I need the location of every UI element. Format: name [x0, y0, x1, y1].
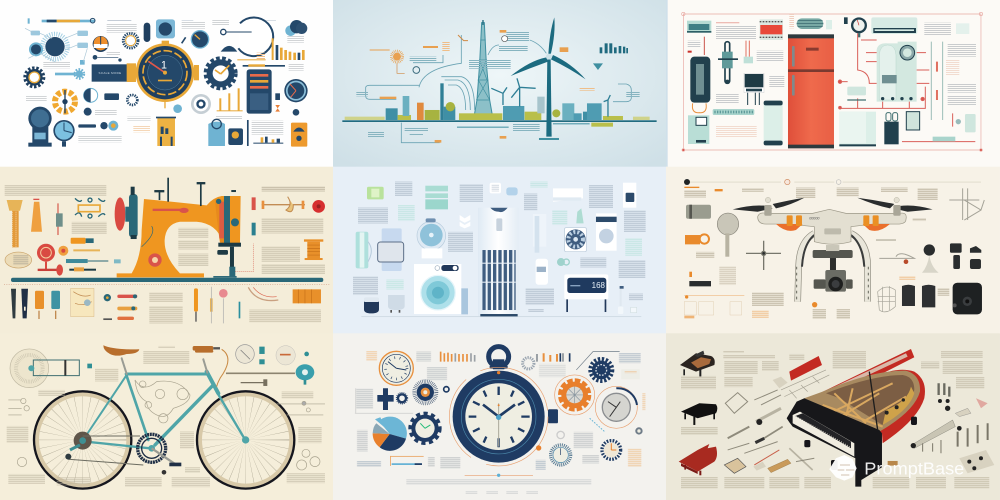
PromptBase watermark [829, 455, 964, 481]
bobbin and dials [37, 238, 94, 276]
text blocks [681, 351, 989, 488]
pie chart [373, 417, 407, 451]
skyline buildings [345, 83, 650, 120]
front wheel [197, 391, 294, 489]
bottom right objects [208, 119, 249, 146]
gear black with gold hub [25, 68, 43, 86]
valve assembly [718, 42, 738, 84]
red frame border [682, 12, 983, 151]
right drone parts [922, 243, 981, 273]
radiator capsule top [789, 13, 832, 29]
top right gauge [182, 30, 209, 49]
arc conduits [366, 35, 631, 143]
panel: mechanical gauges infographic [0, 0, 334, 167]
spiky gear left [414, 381, 449, 403]
washing machine [414, 264, 468, 314]
green radiator left [687, 21, 711, 33]
blueprint details in frame [135, 380, 190, 423]
small orange gauge [93, 36, 122, 62]
navy gear top right [576, 352, 620, 381]
navy gauge right [275, 79, 308, 116]
overlapping circles [285, 20, 307, 36]
orange sewing machine body [117, 196, 241, 277]
top rule line [684, 179, 981, 185]
text blocks [26, 19, 304, 142]
top right frame schematic [879, 188, 984, 258]
gear disc left [10, 349, 92, 388]
floor line [361, 315, 641, 318]
exploded parts left [725, 390, 814, 470]
red piping network [838, 33, 975, 142]
dark monitor [744, 73, 764, 105]
fan box [565, 228, 586, 252]
connector dots [78, 108, 118, 131]
panel: bicycle infographic [0, 333, 334, 500]
orange spool right [304, 239, 323, 260]
bar chart gold [272, 38, 305, 60]
dot rows [103, 294, 137, 320]
bottom right tools [194, 287, 321, 323]
green meter box [688, 115, 709, 144]
air conditioner [871, 17, 917, 34]
text blocks [355, 351, 646, 470]
left tall spool [7, 200, 23, 247]
panel: drone infographic [666, 167, 1000, 334]
scroll parts [75, 198, 105, 218]
tools [66, 249, 121, 271]
stopwatch [449, 347, 558, 466]
piano legs [804, 417, 917, 470]
right diagrams [8, 398, 325, 470]
main wind turbine [511, 17, 586, 140]
bottom row objects [11, 289, 60, 319]
camera module bottom right [902, 283, 982, 314]
wall air conditioner [553, 188, 583, 202]
red fridge [788, 34, 834, 148]
sun icon [370, 50, 405, 73]
panel: wind energy city infographic [333, 0, 667, 167]
propellers [733, 198, 933, 212]
gimbal camera [813, 245, 853, 292]
main green cabinet [877, 42, 917, 102]
PromptBase watermark: PromptBase [864, 458, 964, 478]
spool pins [154, 178, 236, 206]
right top ruler dials [252, 187, 325, 235]
orange sunburst [55, 90, 75, 113]
panel: grand piano infographic [666, 333, 1000, 500]
server rack [243, 64, 285, 114]
machine table bar [11, 278, 323, 282]
small gear and ring dial [127, 94, 211, 114]
bar cluster top right [600, 43, 628, 53]
thermostat phone [596, 183, 636, 251]
piano body red rim [821, 349, 925, 443]
text blocks [688, 22, 976, 138]
blue clock [53, 120, 75, 147]
humidifier box [847, 87, 866, 100]
pressure gauge [844, 17, 867, 37]
central gauge clock: 1 [161, 59, 167, 71]
scale mode label bar: SCALE MODE [99, 71, 121, 75]
central gauge clock [136, 41, 194, 108]
panel: air purifier home appliances [333, 167, 667, 334]
exploded red block [773, 356, 829, 398]
text blocks [5, 185, 325, 323]
piano black case and keyboard [787, 372, 882, 487]
small turbines [491, 78, 610, 117]
gold pillar bars [217, 88, 243, 111]
landing legs [797, 233, 868, 302]
cross icon and small gear [377, 388, 408, 410]
map card [71, 288, 94, 317]
orange clock top left [379, 351, 413, 385]
bottom caption bar [406, 474, 591, 494]
top right instruments [236, 345, 309, 365]
panel: sewing machine infographic [0, 167, 334, 334]
cone thread [31, 199, 63, 235]
digital display unit 168: 168 [592, 281, 606, 290]
half dial and box [84, 88, 119, 102]
large navy gear [206, 58, 236, 88]
saddle [103, 345, 139, 356]
cross bracket [746, 241, 781, 270]
rear wheel [34, 391, 131, 489]
handlebar [193, 346, 228, 387]
lower appliance row [839, 112, 976, 147]
gray clock right [590, 386, 637, 432]
panel: refrigerator diagram [666, 0, 1000, 167]
text and callouts [684, 187, 949, 319]
wire cage [878, 286, 895, 312]
red handwheel [115, 187, 138, 239]
small bottom gears [523, 358, 643, 465]
arc clock [221, 17, 273, 60]
small boxes top [460, 183, 518, 228]
piano interior [804, 371, 920, 432]
sunburst gauge cluster [25, 28, 88, 65]
drone arms and body [758, 197, 906, 244]
text blocks [7, 346, 325, 487]
panel: stopwatch infographic [333, 333, 667, 500]
top scale bar [28, 18, 95, 24]
orange device [291, 123, 307, 147]
bicycle frame [83, 358, 246, 448]
badge [5, 252, 32, 268]
red panel unit [760, 19, 783, 40]
dark appliance [688, 37, 710, 113]
top bar charts [441, 352, 570, 362]
scale mode label bar [92, 63, 199, 82]
small black piano [681, 403, 717, 425]
small red piano [679, 444, 717, 475]
lattice tower [474, 20, 492, 115]
orange gear right [555, 375, 595, 415]
exploded parts right [888, 383, 994, 473]
slider [390, 456, 424, 466]
left mechanical parts [685, 205, 739, 286]
small canisters [364, 295, 405, 313]
digital display unit 168 [564, 274, 608, 312]
text blocks [353, 181, 646, 312]
tower dial [28, 107, 52, 147]
yellow building [156, 117, 176, 146]
slim humidifier [533, 208, 584, 285]
text blocks and labels [356, 30, 640, 143]
small black and brown piano [680, 351, 715, 377]
green tile and stack [367, 186, 448, 209]
hub assembly [226, 364, 314, 386]
ground line [342, 120, 657, 122]
vertical rails [931, 23, 969, 120]
drivetrain [65, 432, 249, 466]
pipes and tank small [744, 41, 753, 63]
capsule and square dial [144, 19, 175, 42]
sphere humidifier [417, 218, 446, 258]
needle assembly [213, 243, 253, 278]
air purifier tower [478, 208, 519, 317]
drone arms and body: 00000 [809, 216, 819, 220]
small navy gear [123, 33, 138, 48]
blue gear wrench [55, 69, 84, 79]
small bar chart [253, 137, 283, 144]
hot water tank [713, 101, 783, 145]
gear clock [411, 414, 439, 443]
water jug and filter [356, 228, 404, 271]
small items bottom right [618, 286, 637, 314]
wood parts [724, 458, 791, 473]
